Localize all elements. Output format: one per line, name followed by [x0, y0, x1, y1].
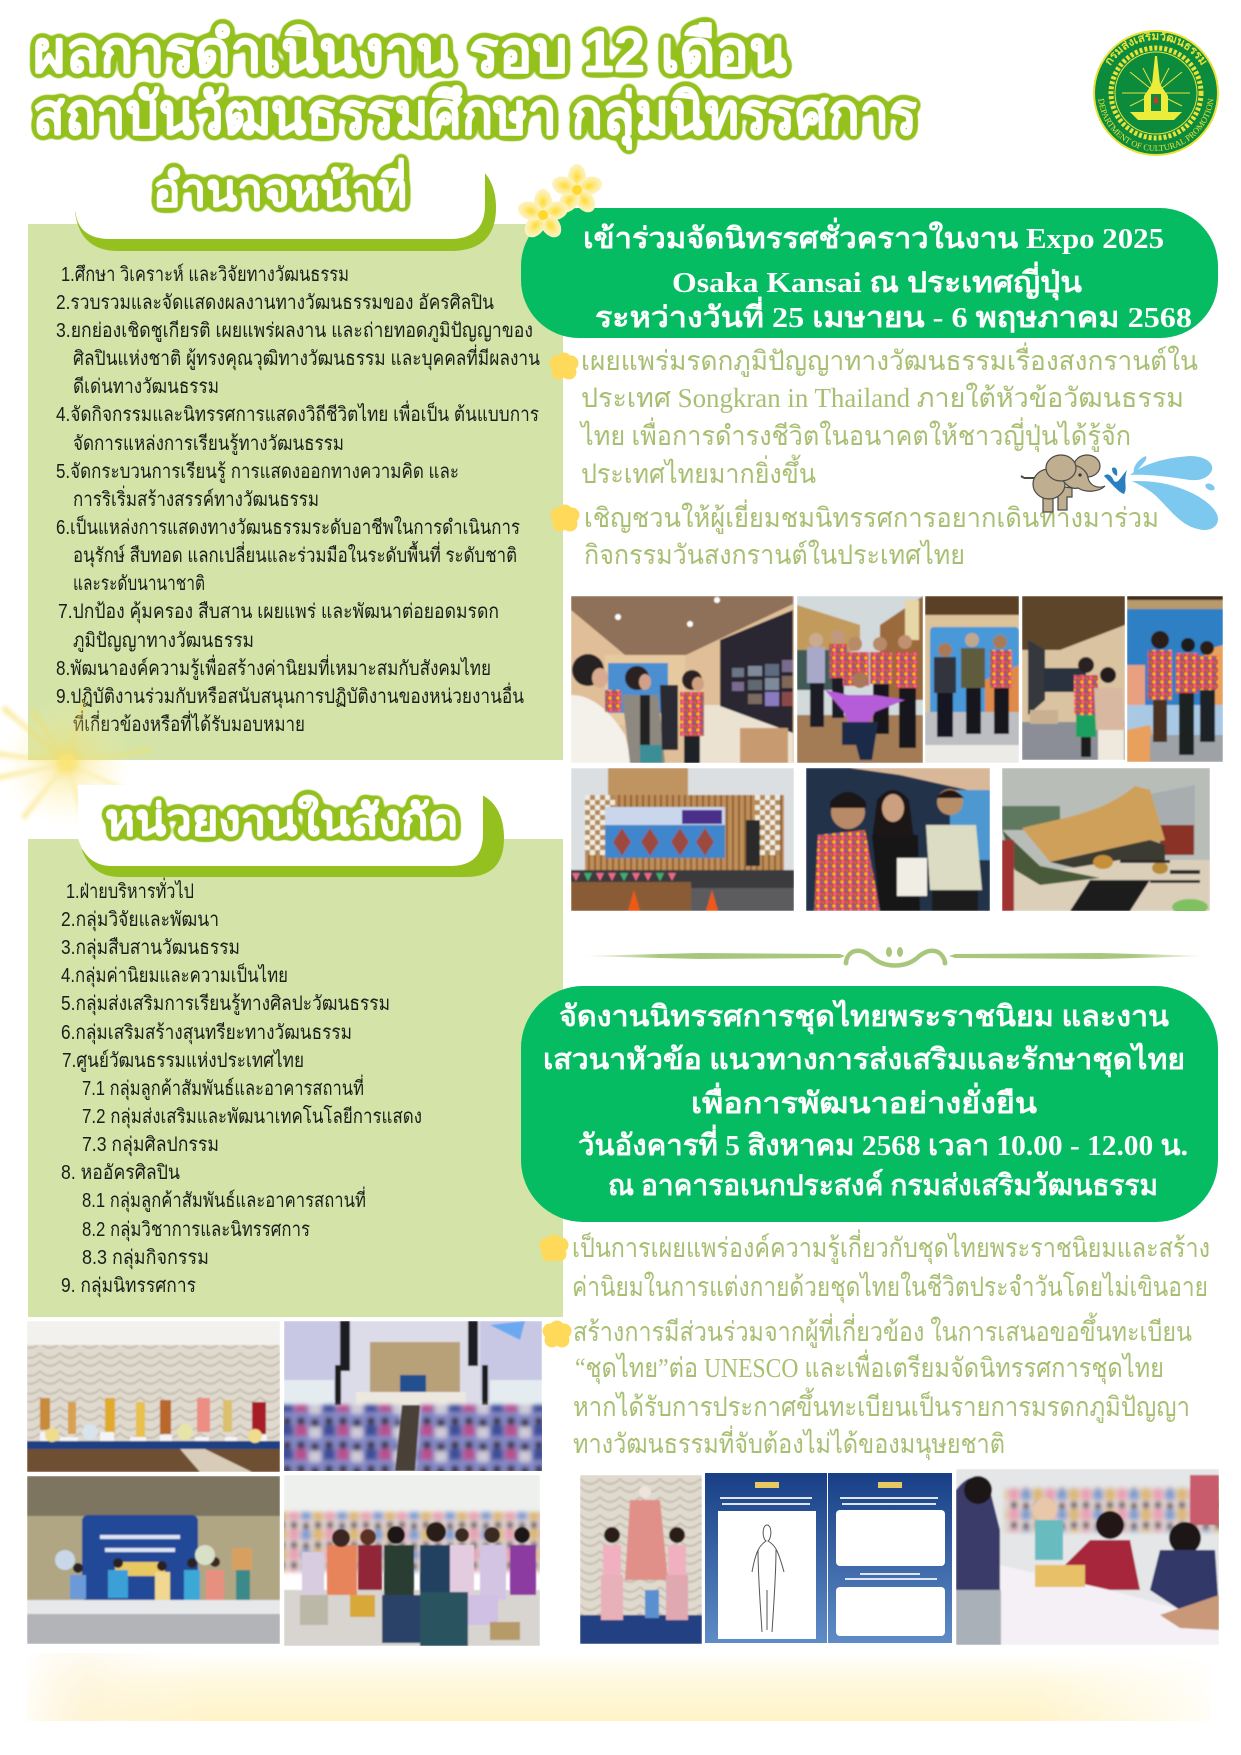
text block: expo bullets: [550, 342, 1198, 570]
callout: expo heading: Osaka Kansai ณ ประเทศญี่ปุ่น: [672, 261, 1082, 300]
photo: Thailand pavilion: [1002, 768, 1210, 911]
units list text: 5.กลุ่มส่งเสริมการเรียนรู้ทางศิลปะวัฒนธรรม: [61, 993, 390, 1016]
photo: costume and children: [580, 1475, 702, 1644]
text block: expo bullets: เผยแพร่มรดกภูมิปัญญาทางวัฒนธรรมเรื่องสงกรานต์ใน: [581, 342, 1198, 377]
duties list text: 2.รวบรวมและจัดแสดงผลงานทางวัฒนธรรมของ อัครศิลปิน: [56, 292, 494, 314]
units list text: 7.3 กลุ่มศิลปกรรม: [82, 1134, 219, 1157]
duties list text: ดีเด่นทางวัฒนธรรม: [73, 376, 219, 398]
callout: expo heading: เข้าร่วมจัดนิทรรศชั่วคราวในงาน Expo 2025: [583, 217, 1164, 255]
text block: costume bullets: ทางวัฒนธรรมที่จับต้องไม่ได้ของมนุษยชาติ: [573, 1425, 1005, 1461]
text block: expo bullets: ประเทศไทยมากยิ่งขึ้น: [581, 454, 816, 489]
duties list text: 4.จัดกิจกรรมและนิทรรศการแสดงวิถีชีวิตไทย เพื่อเป็น ต้นแบบการ: [56, 400, 539, 426]
duties list text: 5.จัดกระบวนการเรียนรู้ การแสดงออกทางความคิด และ: [56, 461, 459, 484]
icon: sun flare: [0, 698, 150, 837]
title: ผลการดำเนินงาน รอบ 12 เดือน: [33, 20, 787, 85]
photo: panel discussion stage: [27, 1476, 280, 1644]
callout: costume exhibition heading: เพื่อการพัฒนาอย่างยั่งยืน: [691, 1082, 1037, 1120]
icon: bullet flower: [540, 1234, 568, 1262]
callout: costume exhibition heading: ณ อาคารอเนกประสงค์ กรมส่งเสริมวัฒนธรรม: [608, 1168, 1158, 1202]
duties list text: จัดการแหล่งการเรียนรู้ทางวัฒนธรรม: [73, 433, 344, 456]
units list text: 6.กลุ่มเสริมสร้างสุนทรียะทางวัฒนธรรม: [61, 1022, 352, 1045]
units list text: 8.2 กลุ่มวิชาการและนิทรรศการ: [82, 1219, 310, 1242]
units list text: 2.กลุ่มวิจัยและพัฒนา: [61, 909, 219, 932]
duties list text: 7.ปกป้อง คุ้มครอง สืบสาน เผยแพร่ และพัฒนาต่อยอดมรดก: [58, 601, 499, 624]
heading: duties: อำนาจหน้าที่: [153, 158, 407, 216]
units list text: 1.ฝ่ายบริหารทั่วไป: [66, 877, 194, 903]
photo: book presentation: [806, 768, 990, 911]
units list text: 7.1 กลุ่มลูกค้าสัมพันธ์และอาคารสถานที่: [82, 1074, 364, 1101]
photo: costume display: [27, 1321, 280, 1472]
units list text: 4.กลุ่มค่านิยมและความเป็นไทย: [61, 962, 288, 988]
text block: expo bullets: ประเทศ Songkran in Thailand ภายใต้หัวข้อวัฒนธรรม: [581, 382, 1184, 413]
icon: body outline: [752, 1525, 784, 1632]
units list text: 8. หออัครศิลปิน: [61, 1162, 180, 1184]
title: สถาบันวัฒนธรรมศึกษา กลุ่มนิทรรศการ: [33, 82, 917, 151]
text block: costume bullets: “ชุดไทย”ต่อ UNESCO และเพื่อเตรียมจัดนิทรรศการชุดไทย: [575, 1349, 1164, 1385]
callout: costume exhibition heading: [521, 986, 1218, 1222]
photo: seated audience: [284, 1475, 540, 1646]
duties list text: ภูมิปัญญาทางวัฒนธรรม: [73, 630, 254, 653]
duties list text: [56, 263, 540, 736]
icon: ornamental divider: [580, 947, 1209, 966]
bottom decorative band: [27, 1653, 1211, 1721]
icon: plumeria flowers: [515, 164, 605, 241]
text block: expo bullets: กิจกรรมวันสงกรานต์ในประเทศไทย: [584, 539, 965, 570]
icon: bullet flower: [542, 1320, 572, 1348]
duties list text: ศิลปินแห่งชาติ ผู้ทรงคุณวุฒิทางวัฒนธรรม และบุคคลที่มีผลงาน: [73, 344, 540, 371]
photo: guide with visitor: [1022, 596, 1125, 760]
units list text: 3.กลุ่มสืบสานวัฒนธรรม: [61, 937, 240, 960]
photo: costume form panels: [828, 1473, 952, 1643]
heading: duties: [75, 150, 496, 251]
duties list text: ที่เกี่ยวข้องหรือที่ได้รับมอบหมาย: [73, 710, 305, 736]
callout: expo heading: ระหว่างวันที่ 25 เมษายน - 6 พฤษภาคม 2568: [595, 296, 1192, 334]
photo: three people before backdrop: [925, 596, 1019, 763]
units list text: 7.2 กลุ่มส่งเสริมและพัฒนาเทคโนโลยีการแสดง: [82, 1105, 422, 1129]
text block: expo bullets: ไทย เพื่อการดำรงชีวิตในอนาคตให้ชาวญี่ปุ่นได้รู้จัก: [579, 417, 1131, 453]
text block: expo bullets: เชิญชวนให้ผู้เยี่ยมชมนิทรรศการอยากเดินทางมาร่วม: [584, 499, 1159, 534]
photo: three people with posters: [1127, 596, 1223, 762]
icon: department logo: DEPARTMENT OF CULTURAL PROMOTION: [1098, 98, 1214, 151]
icon: bullet flower: [550, 352, 578, 380]
title: [33, 20, 917, 151]
photo: visitors at screen: [571, 596, 794, 763]
duties list text: 9.ปฏิบัติงานร่วมกับหรือสนับสนุนการปฏิบัติงานของหน่วยงานอื่น: [56, 682, 524, 709]
heading: affiliated units: หน่วยงานในสังกัด: [105, 794, 458, 845]
photo: group on deck: [797, 596, 923, 763]
duties list text: และระดับนานาชาติ: [73, 573, 205, 595]
photo: seminar hall: [284, 1321, 542, 1471]
callout: expo heading: [521, 208, 1218, 338]
photo: songkran pavilion: [571, 768, 794, 911]
units list text: 9. กลุ่มนิทรรศการ: [61, 1275, 196, 1298]
duties list text: 6.เป็นแหล่งการแสดงทางวัฒนธรรมระดับอาชีพในการดำเนินการ: [56, 514, 520, 539]
icon: department logo: [1093, 30, 1219, 156]
panel: affiliated units: [28, 839, 563, 1317]
duties list text: การริเริ่มสร้างสรรค์ทางวัฒนธรรม: [73, 485, 319, 511]
callout: costume exhibition heading: จัดงานนิทรรศการชุดไทยพระราชนิยม และงาน: [559, 999, 1169, 1034]
units list text: 8.3 กลุ่มกิจกรรม: [82, 1247, 209, 1270]
duties list text: 1.ศึกษา วิเคราะห์ และวิจัยทางวัฒนธรรม: [61, 263, 349, 286]
icon: department logo: กรมส่งเสริมวัฒนธรรม: [1106, 32, 1207, 66]
duties list text: 3.ยกย่องเชิดชูเกียรติ เผยแพร่ผลงาน และถ่ายทอดภูมิปัญญาของ: [56, 320, 533, 343]
duties list text: อนุรักษ์ สืบทอด แลกเปลี่ยนและร่วมมือในระดับพื้นที่ ระดับชาติ: [73, 541, 517, 568]
duties list text: 8.พัฒนาองค์ความรู้เพื่อสร้างค่านิยมที่เหมาะสมกับสังคมไทย: [56, 654, 491, 681]
units list text: 8.1 กลุ่มลูกค้าสัมพันธ์และอาคารสถานที่: [82, 1186, 366, 1213]
panel: duties: [28, 224, 563, 760]
units list text: [61, 877, 422, 1298]
photo: participants writing: [956, 1469, 1219, 1645]
icon: elephant spraying water: [1021, 455, 1218, 530]
callout: costume exhibition heading: วันอังคารที่ 5 สิงหาคม 2568 เวลา 10.00 - 12.00 น.: [578, 1124, 1188, 1162]
text block: costume bullets: [540, 1229, 1210, 1461]
heading: affiliated units: [78, 785, 504, 877]
units list text: 7.ศูนย์วัฒนธรรมแห่งประเทศไทย: [62, 1049, 304, 1073]
callout: costume exhibition heading: เสวนาหัวข้อ แนวทางการส่งเสริมและรักษาชุดไทย: [543, 1042, 1185, 1077]
icon: bullet flower: [550, 504, 580, 532]
photo: costume design form: [705, 1473, 827, 1643]
